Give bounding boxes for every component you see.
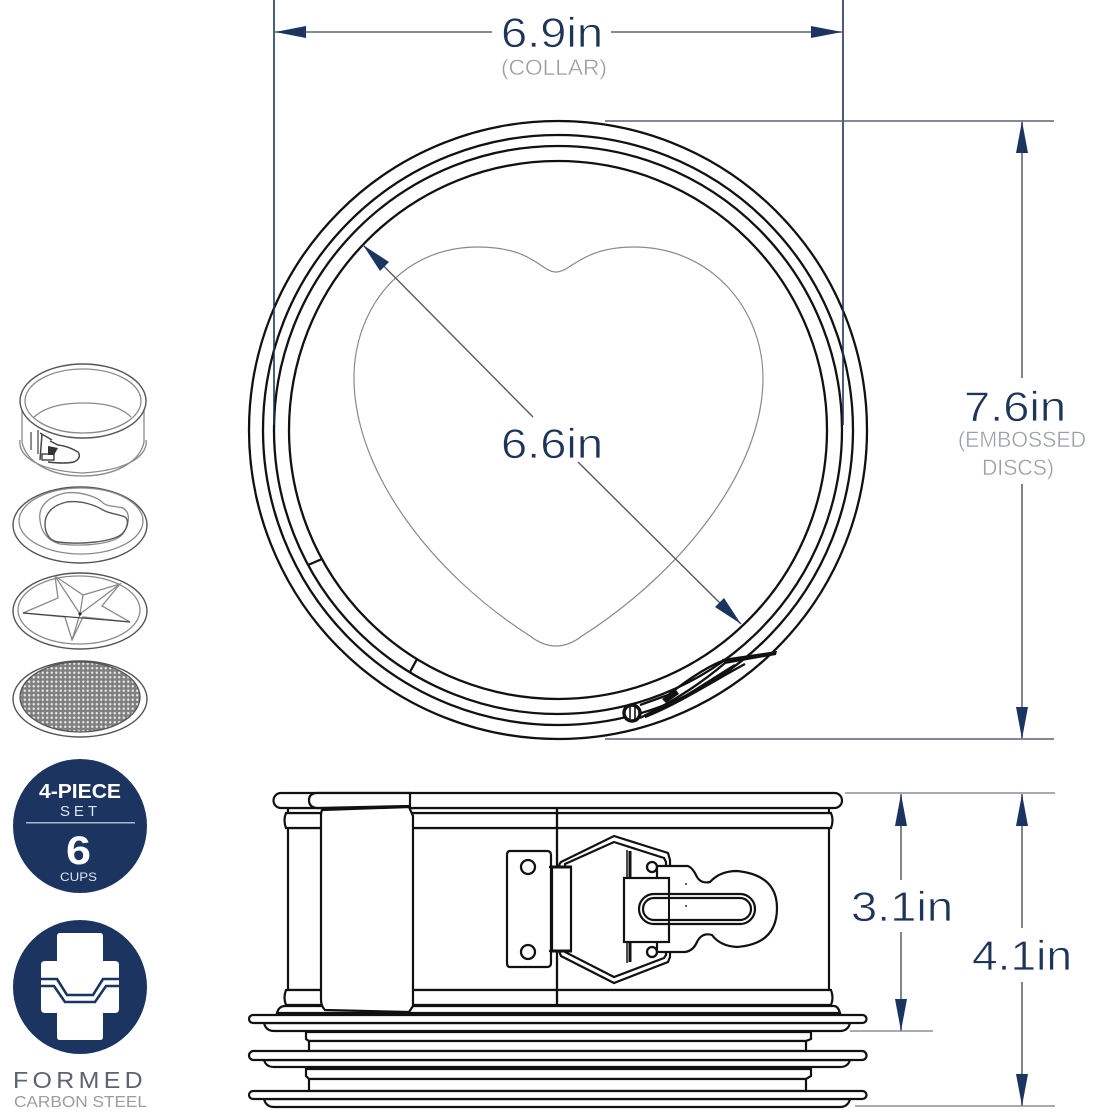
icon: mesh disc — [13, 661, 147, 737]
icon: star disc — [13, 573, 147, 649]
label: 7.6in embossed discs — [958, 383, 1086, 480]
badge: 4-piece set, 6 cups: SET — [60, 803, 97, 820]
side view: latch and hinge — [507, 836, 777, 983]
heart embossed outline — [354, 247, 763, 646]
badge: 4-piece set, 6 cups: 4-PIECE — [39, 781, 121, 803]
side view: stacked embossed discs — [249, 1015, 866, 1107]
label: 6.6in interior: 6.6in — [501, 420, 603, 467]
spring clasp on top view — [624, 651, 777, 721]
label: 7.6in embossed discs: 7.6in — [964, 383, 1066, 430]
interior diameter arrow — [363, 245, 741, 624]
label: 6.9in collar: (COLLAR) — [501, 55, 607, 80]
icon: heart disc — [13, 487, 147, 563]
badge: 4-piece set, 6 cups — [13, 759, 147, 893]
badge: formed steel cross-section — [13, 920, 147, 1054]
label: formed carbon steel — [13, 1067, 147, 1111]
top view: concentric pan rings — [249, 121, 867, 739]
collar width dimension lines — [274, 0, 843, 425]
embossed discs height dimension — [605, 121, 1054, 739]
label: 6.9in collar — [501, 9, 607, 80]
side dimension lines: 4.1in — [1016, 794, 1028, 1106]
side view: collar body — [274, 793, 842, 1013]
label: formed carbon steel: FORMED — [13, 1067, 147, 1093]
side dimension lines: 3.1in — [845, 793, 1055, 1106]
label: 6.9in collar: 6.9in — [501, 9, 603, 56]
label: 7.6in embossed discs: (EMBOSSED — [958, 427, 1086, 452]
icon: collar ring — [20, 364, 146, 476]
badge: 4-piece set, 6 cups: 6 — [66, 829, 91, 873]
badge: 4-piece set, 6 cups: CUPS — [60, 870, 97, 884]
label: 4.1in: 4.1in — [972, 932, 1072, 979]
label: formed carbon steel: CARBON STEEL — [14, 1094, 147, 1111]
label: 7.6in embossed discs: DISCS) — [982, 455, 1054, 480]
label: 3.1in: 3.1in — [851, 883, 953, 930]
